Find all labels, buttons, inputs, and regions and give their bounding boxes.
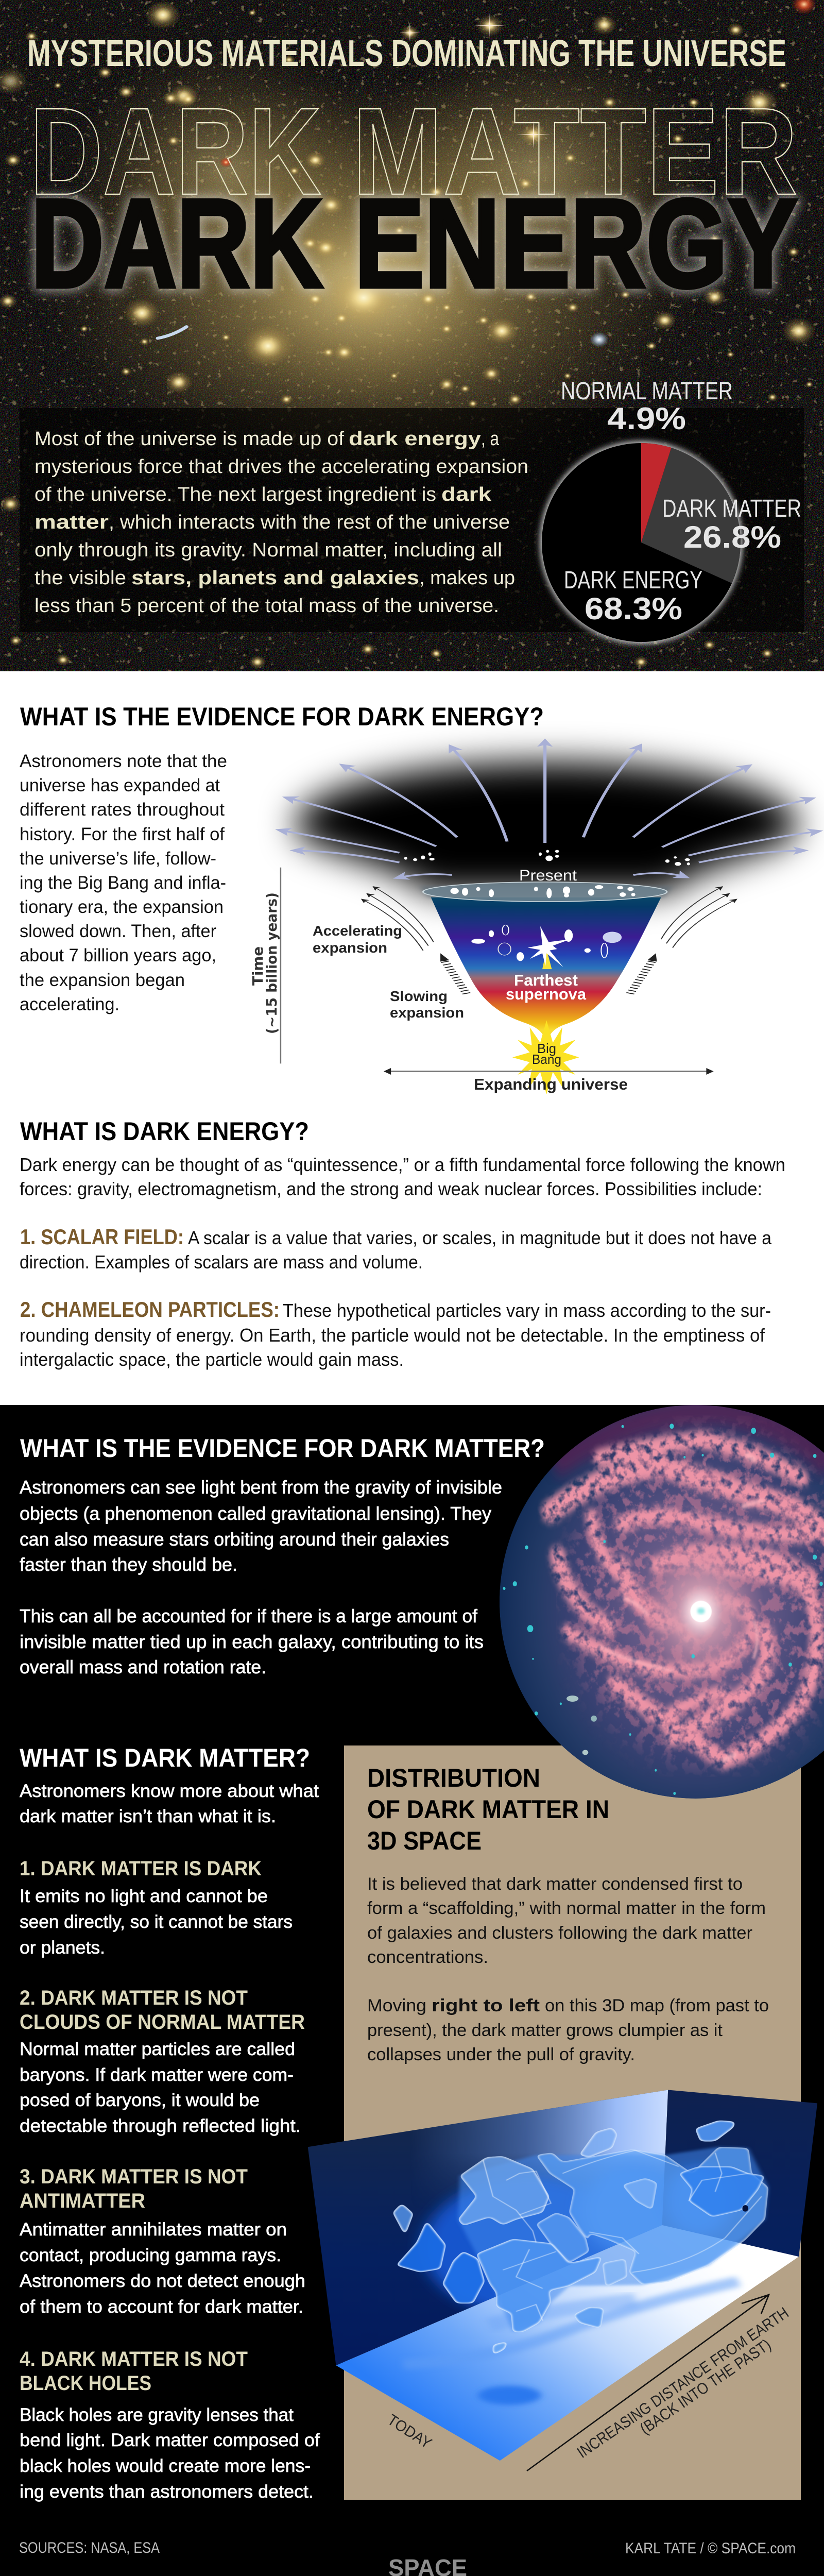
item 4: not black holes — [20, 2348, 320, 2502]
image: 3D dark matter map — [308, 2090, 817, 2461]
text: evidence for dark matter: Astronomers can see light bent from the gravity of invisible — [20, 1477, 502, 1498]
item 2: not clouds of normal matter: detectable through reflected light. — [20, 2116, 301, 2136]
maroon outer tint — [553, 1411, 824, 1468]
panel text: scaffolding: form a “scaffolding,” with normal matter in the form — [367, 1899, 766, 1918]
text: evidence for dark energy: the expansion began — [20, 970, 185, 990]
panel heading: distribution of dark matter: OF DARK MATTER IN — [367, 1795, 609, 1824]
item 3: not antimatter — [20, 2165, 305, 2317]
pie label: normal matter — [561, 378, 733, 436]
label: accelerating expansion: Accelerating — [313, 923, 402, 939]
panel text: right to left: present), the dark matter grows clumpier as it — [367, 2021, 723, 2040]
item 2: not clouds of normal matter: 2. DARK MATTER IS NOT — [20, 1987, 248, 2009]
pie label: normal matter: 4.9% — [607, 401, 686, 436]
panel heading: distribution of dark matter — [367, 1764, 609, 1855]
item 4: not black holes: ing events than astronomers detect. — [20, 2482, 314, 2502]
panel heading: distribution of dark matter: DISTRIBUTION — [367, 1764, 540, 1792]
bright stars with diffraction spikes — [400, 12, 551, 148]
hero title: DARK MATTER outlined: DARK — [30, 82, 321, 221]
hero paragraph: , makes up — [419, 567, 515, 589]
hero paragraph: stars, planets and galaxies — [131, 567, 419, 589]
heading: evidence for dark matter: WHAT IS THE EVIDENCE FOR DARK MATTER? — [20, 1434, 545, 1463]
page background: black section — [0, 1405, 824, 2576]
pie label: normal matter: NORMAL MATTER — [561, 378, 733, 405]
panel heading: distribution of dark matter: 3D SPACE — [367, 1826, 482, 1855]
label: today: TODAY — [384, 2411, 435, 2452]
text: evidence for dark energy: the universe’s life, follow- — [20, 849, 216, 869]
hero paragraph: the visible — [35, 567, 126, 589]
text: evidence for dark energy — [20, 751, 227, 1014]
item: chameleon particles: rounding density of energy. On Earth, the particle would not be detectable. In the emptiness of — [20, 1325, 765, 1346]
hero title: DARK ENERGY filled with glow — [31, 173, 798, 314]
text: dark energy intro: forces: gravity, electromagnetism, and the strong and weak nuclear forces. Possibilities include: — [20, 1178, 762, 1199]
label: expanding universe: Expanding universe — [474, 1075, 628, 1093]
pie chart — [540, 378, 801, 643]
dark matter clumps — [393, 2121, 768, 2355]
hero paragraph — [35, 428, 528, 617]
label: increasing distance from earth: INCREASING DISTANCE FROM EARTH — [574, 2303, 792, 2462]
item 2: not clouds of normal matter: posed of baryons, it would be — [20, 2090, 260, 2110]
pie label: dark matter — [662, 495, 801, 554]
label: big bang — [532, 1041, 561, 1067]
item 3: not antimatter: of them to account for dark matter. — [20, 2297, 303, 2317]
item 4: not black holes: bend light. Dark matter composed of — [20, 2430, 320, 2450]
item 3: not antimatter: Astronomers do not detect enough — [20, 2271, 305, 2291]
hero text panel — [20, 408, 804, 632]
text: evidence for dark energy: tionary era, the expansion — [20, 897, 224, 917]
credit: KARL TATE / © SPACE.com — [625, 2540, 796, 2557]
panel text: scaffolding — [367, 1874, 766, 1967]
panel text: right to left: collapses under the pull of gravity. — [367, 2045, 635, 2064]
item 2: not clouds of normal matter: CLOUDS OF NORMAL MATTER — [20, 2011, 305, 2033]
hero paragraph: mysterious force that drives the accelerating expansion — [35, 456, 528, 478]
sources: SOURCES: NASA, ESA — [19, 2539, 160, 2556]
heading: evidence for dark energy: WHAT IS THE EVIDENCE FOR DARK ENERGY? — [20, 702, 544, 731]
label: time axis: Time — [249, 946, 266, 986]
panel text: scaffolding: It is believed that dark matter condensed first to — [367, 1874, 743, 1894]
text: evidence for dark matter: faster than they should be. — [20, 1554, 237, 1575]
diagram: expansion of the universe — [249, 741, 819, 1094]
hero paragraph: , which interacts with the rest of the universe — [109, 512, 510, 533]
label: slowing expansion: Slowing — [390, 988, 448, 1004]
text: evidence for dark matter: This can all be accounted for if there is a large amount of — [20, 1605, 478, 1626]
image: spiral galaxy — [500, 1405, 824, 1799]
hero title: DARK ENERGY filled with glow: DARK — [31, 173, 323, 314]
text: evidence for dark energy: about 7 billion years ago, — [20, 945, 216, 965]
hero paragraph: matter — [35, 512, 109, 533]
panel text: right to left: right to left — [432, 1996, 540, 2015]
label: accelerating expansion — [313, 923, 402, 956]
item 3: not antimatter: contact, producing gamma rays. — [20, 2245, 281, 2265]
item: chameleon particles: intergalactic space, the particle would gain mass. — [20, 1349, 404, 1370]
item 2: not clouds of normal matter: baryons. If dark matter were com- — [20, 2065, 294, 2085]
back wall — [662, 2090, 817, 2257]
item 3: not antimatter: 3. DARK MATTER IS NOT — [20, 2165, 248, 2188]
page background: white section — [0, 671, 824, 1405]
item 1: dark matter is dark — [20, 1857, 293, 1958]
clump filaments — [483, 2150, 762, 2320]
text: evidence for dark matter: overall mass and rotation rate. — [20, 1656, 266, 1677]
text: evidence for dark matter — [20, 1477, 502, 1677]
item 1: dark matter is dark: 1. DARK MATTER IS DARK — [20, 1857, 262, 1880]
text: evidence for dark matter: can also measure stars orbiting around their galaxies — [20, 1529, 449, 1550]
item: scalar field — [20, 1225, 772, 1273]
text: dark energy intro: Dark energy can be thought of as “quintessence,” or a fifth fundamental force following the known — [20, 1154, 785, 1175]
text: evidence for dark energy: different rates throughout — [20, 800, 225, 820]
label: big bang: Bang — [532, 1052, 561, 1067]
hero paragraph: dark energy — [349, 428, 481, 450]
panel: distribution of dark matter, tan background — [344, 1745, 801, 2500]
item 4: not black holes: 4. DARK MATTER IS NOT — [20, 2348, 248, 2370]
item 4: not black holes: Black holes are gravity lenses that — [20, 2405, 294, 2425]
floor — [336, 2225, 799, 2461]
left wall — [308, 2090, 689, 2365]
panel text: scaffolding: of galaxies and clusters following the dark matter — [367, 1923, 752, 1943]
item 3: not antimatter: ANTIMATTER — [20, 2190, 145, 2212]
text: evidence for dark matter: invisible matter tied up in each galaxy, contributing to its — [20, 1631, 484, 1652]
text: evidence for dark energy: universe has expanded at — [20, 775, 220, 795]
label: farthest supernova: supernova — [506, 985, 587, 1003]
hero title: DARK MATTER outlined — [30, 82, 798, 221]
hero paragraph: of the universe. The next largest ingredient is — [35, 484, 436, 505]
arrow: increasing distance — [527, 2295, 769, 2471]
text: evidence for dark energy: Astronomers note that the — [20, 751, 227, 771]
panel text: right to left: on this 3D map (from past to — [545, 1996, 769, 2015]
item 1: dark matter is dark: seen directly, so it cannot be stars — [20, 1912, 293, 1932]
hero title: DARK ENERGY filled with glow: DARK — [31, 173, 323, 314]
label: slowing expansion: expansion — [390, 1005, 464, 1021]
label: farthest supernova: Farthest — [514, 971, 578, 989]
item: chameleon particles: 2. CHAMELEON PARTICLES: — [20, 1297, 280, 1321]
item 2: not clouds of normal matter: Normal matter particles are called — [20, 2039, 295, 2059]
label: present: Present — [519, 867, 577, 884]
label: slowing expansion — [390, 988, 464, 1021]
label: time axis: (~15 billion years) — [263, 892, 280, 1034]
item: scalar field: direction. Examples of scalars are mass and volume. — [20, 1251, 423, 1273]
panel text: right to left — [367, 1996, 769, 2064]
label: increasing distance from earth: (BACK INTO THE PAST) — [637, 2335, 774, 2438]
item: scalar field: 1. SCALAR FIELD: — [20, 1225, 184, 1249]
diagram shapes — [280, 741, 819, 1094]
label: big bang: Big — [537, 1041, 556, 1056]
panel text: right to left: Moving — [367, 1996, 426, 2015]
label: time axis — [249, 892, 280, 1034]
hero paragraph: dark — [441, 484, 492, 505]
item 4: not black holes: black holes would create more lens- — [20, 2456, 311, 2476]
label: farthest supernova — [506, 971, 587, 1003]
text: evidence for dark energy: history. For the first half of — [20, 824, 225, 844]
pie label: dark matter: 26.8% — [683, 520, 781, 554]
hero: galaxy cluster photo background — [0, 0, 824, 671]
pie label: dark energy: 68.3% — [585, 591, 682, 626]
item 1: dark matter is dark: or planets. — [20, 1938, 105, 1958]
item 3: not antimatter: Antimatter annihilates matter on — [20, 2219, 287, 2240]
item: chameleon particles — [20, 1297, 771, 1370]
hero paragraph: only through its gravity. Normal matter, including all — [35, 539, 502, 561]
pie label: dark energy: DARK ENERGY — [564, 567, 702, 594]
text: evidence for dark energy: accelerating. — [20, 994, 119, 1014]
hero paragraph: less than 5 percent of the total mass of the universe. — [35, 595, 499, 617]
hero paragraph: Most of the universe is made up of — [35, 428, 344, 450]
item 1: dark matter is dark: It emits no light and cannot be — [20, 1886, 268, 1906]
text: evidence for dark energy: ing the Big Bang and infla- — [20, 873, 226, 893]
item 2: not clouds of normal matter — [20, 1987, 305, 2136]
panel text: scaffolding: concentrations. — [367, 1947, 488, 1967]
heading: what is dark matter: WHAT IS DARK MATTER? — [20, 1743, 310, 1772]
text: dark matter intro — [20, 1781, 319, 1826]
text: dark energy intro — [20, 1154, 785, 1199]
text: dark matter intro: dark matter isn’t than what it is. — [20, 1806, 276, 1826]
text: evidence for dark matter: objects (a phenomenon called gravitational lensing). They — [20, 1503, 491, 1524]
item: chameleon particles: These hypothetical particles vary in mass according to the sur- — [283, 1300, 771, 1321]
hero paragraph: , a — [481, 428, 500, 450]
text: evidence for dark energy: slowed down. Then, after — [20, 921, 216, 941]
heading: what is dark energy: WHAT IS DARK ENERGY? — [20, 1117, 309, 1146]
text: dark matter intro: Astronomers know more about what — [20, 1781, 319, 1801]
pie label: dark energy — [564, 567, 702, 626]
item: scalar field: A scalar is a value that varies, or scales, in magnitude but it does not have a — [188, 1227, 772, 1248]
item 4: not black holes: BLACK HOLES — [20, 2372, 151, 2395]
label: accelerating expansion: expansion — [313, 940, 387, 956]
